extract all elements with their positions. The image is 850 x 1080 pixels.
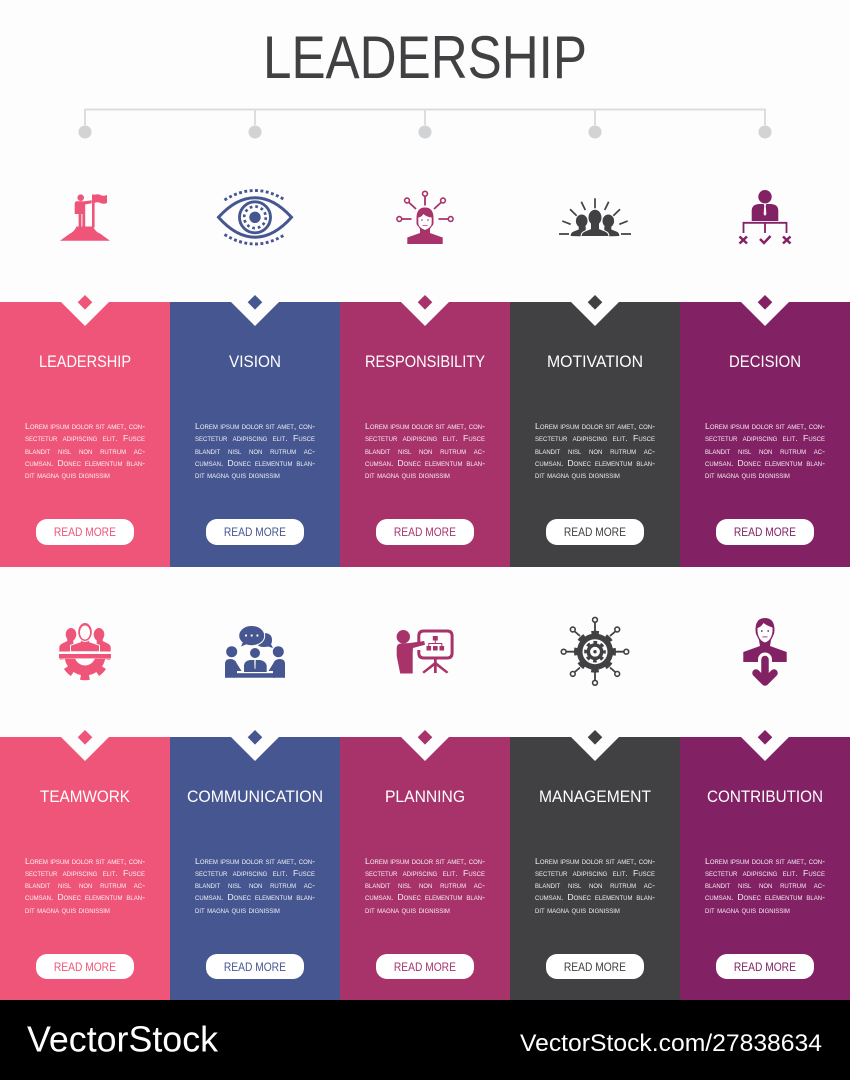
body text: blandit nisl non rutrum ac-	[25, 446, 145, 456]
body text: cumsan. Donec elementum blan-	[705, 458, 825, 468]
body text	[25, 421, 145, 480]
notch and diamond marker	[571, 295, 619, 326]
body text: blandit nisl non rutrum ac-	[535, 446, 655, 456]
body text: cumsan. Donec elementum blan-	[705, 892, 825, 902]
panel: Planning	[340, 737, 510, 1000]
body text: sectetur adipiscing elit. Fusce	[535, 868, 655, 878]
body text: dit magna quis dignissim	[705, 470, 790, 480]
panel: Communication	[170, 737, 340, 1000]
body text	[535, 856, 655, 915]
notch and diamond marker	[741, 730, 789, 761]
body text: blandit nisl non rutrum ac-	[535, 880, 655, 890]
body text: Lorem ipsum dolor sit amet, con-	[25, 421, 145, 431]
body text: sectetur adipiscing elit. Fusce	[25, 433, 145, 443]
heading: TEAMWORK	[40, 787, 131, 806]
body text: blandit nisl non rutrum ac-	[195, 446, 315, 456]
read more button: READ MORE	[224, 525, 286, 539]
panel: Motivation	[510, 302, 680, 567]
read more button: READ MORE	[394, 525, 456, 539]
notch and diamond marker	[231, 295, 279, 326]
heading: CONTRIBUTION	[707, 787, 823, 806]
body text	[535, 421, 655, 480]
body text: blandit nisl non rutrum ac-	[705, 880, 825, 890]
panel: Responsibility	[340, 302, 510, 567]
body text: dit magna quis dignissim	[25, 470, 110, 480]
body text	[365, 421, 485, 480]
notch and diamond marker	[741, 295, 789, 326]
read more button	[716, 954, 814, 979]
read more button	[546, 954, 644, 979]
body text: cumsan. Donec elementum blan-	[195, 892, 315, 902]
footer watermark bar: VectorStock	[27, 1018, 219, 1060]
timeline connector with five nodes	[78, 108, 772, 138]
heading: DECISION	[729, 352, 801, 371]
read more button	[206, 519, 304, 544]
notch and diamond marker	[571, 730, 619, 761]
body text: dit magna quis dignissim	[535, 905, 620, 915]
read more button: READ MORE	[394, 960, 456, 974]
body text	[195, 421, 315, 480]
heading: MOTIVATION	[547, 352, 643, 371]
body text: sectetur adipiscing elit. Fusce	[25, 868, 145, 878]
body text: dit magna quis dignissim	[365, 470, 450, 480]
body text: sectetur adipiscing elit. Fusce	[365, 433, 485, 443]
panel: Management	[510, 737, 680, 1000]
icon: eye	[216, 189, 294, 246]
body text: dit magna quis dignissim	[25, 905, 110, 915]
notch and diamond marker	[401, 295, 449, 326]
read more button: READ MORE	[54, 525, 116, 539]
body text: blandit nisl non rutrum ac-	[195, 880, 315, 890]
body text: sectetur adipiscing elit. Fusce	[705, 433, 825, 443]
read more button	[376, 519, 474, 544]
body text: Lorem ipsum dolor sit amet, con-	[705, 421, 825, 431]
body text: sectetur adipiscing elit. Fusce	[195, 868, 315, 878]
read more button: READ MORE	[224, 960, 286, 974]
read more button	[36, 519, 134, 544]
read more button	[546, 519, 644, 544]
read more button: READ MORE	[54, 960, 116, 974]
body text: sectetur adipiscing elit. Fusce	[365, 868, 485, 878]
body text	[705, 854, 825, 916]
read more button	[376, 954, 474, 979]
body text	[25, 856, 145, 915]
icon: group with rays	[559, 198, 631, 236]
icon: gear with radiating nodes	[560, 616, 630, 686]
footer watermark bar	[0, 1000, 850, 1080]
body text	[195, 856, 315, 915]
body text	[365, 856, 485, 915]
read more button: READ MORE	[564, 525, 626, 539]
body text: blandit nisl non rutrum ac-	[365, 880, 485, 890]
body text: dit magna quis dignissim	[365, 905, 450, 915]
panel: Contribution	[680, 737, 850, 1000]
icon: team meeting with speech bubbles	[225, 626, 285, 678]
heading: MANAGEMENT	[539, 787, 651, 806]
read more button: READ MORE	[734, 960, 796, 974]
body text: blandit nisl non rutrum ac-	[705, 446, 825, 456]
body text: sectetur adipiscing elit. Fusce	[535, 433, 655, 443]
body text: blandit nisl non rutrum ac-	[25, 880, 145, 890]
body text: dit magna quis dignissim	[535, 470, 620, 480]
body text: Lorem ipsum dolor sit amet, con-	[195, 421, 315, 431]
read more button: READ MORE	[734, 525, 796, 539]
body text: dit magna quis dignissim	[705, 905, 790, 915]
panel: Decision	[680, 302, 850, 567]
body text: Lorem ipsum dolor sit amet, con-	[365, 856, 485, 866]
icon: decision tree with manager	[738, 190, 792, 245]
body text: Lorem ipsum dolor sit amet, con-	[705, 856, 825, 866]
body text: Lorem ipsum dolor sit amet, con-	[535, 856, 655, 866]
read more button	[716, 519, 814, 544]
body text: cumsan. Donec elementum blan-	[535, 458, 655, 468]
heading: VISION	[229, 352, 281, 371]
body text: Lorem ipsum dolor sit amet, con-	[535, 421, 655, 431]
notch and diamond marker	[61, 295, 109, 326]
body text: cumsan. Donec elementum blan-	[25, 458, 145, 468]
body text: Lorem ipsum dolor sit amet, con-	[365, 421, 485, 431]
body text: cumsan. Donec elementum blan-	[365, 458, 485, 468]
body text: Lorem ipsum dolor sit amet, con-	[25, 856, 145, 866]
notch and diamond marker	[231, 730, 279, 761]
body text: sectetur adipiscing elit. Fusce	[705, 868, 825, 878]
read more button: READ MORE	[564, 960, 626, 974]
panel: Teamwork	[0, 737, 170, 1000]
body text: cumsan. Donec elementum blan-	[535, 892, 655, 902]
body text: dit magna quis dignissim	[195, 905, 280, 915]
icon: presenter at flip chart	[396, 630, 454, 674]
notch and diamond marker	[401, 730, 449, 761]
body text: Lorem ipsum dolor sit amet, con-	[195, 856, 315, 866]
read more button	[36, 954, 134, 979]
icon: person with downward arrow	[743, 618, 787, 686]
icon: person with radiating nodes	[396, 190, 454, 244]
body text: sectetur adipiscing elit. Fusce	[195, 433, 315, 443]
panel: Leadership	[0, 302, 170, 567]
heading: RESPONSIBILITY	[365, 352, 485, 371]
body text: blandit nisl non rutrum ac-	[365, 446, 485, 456]
read more button	[206, 954, 304, 979]
panel: Vision	[170, 302, 340, 567]
footer watermark bar: VectorStock.com/27838634	[520, 1030, 822, 1057]
body text: cumsan. Donec elementum blan-	[25, 892, 145, 902]
body text: cumsan. Donec elementum blan-	[195, 458, 315, 468]
icon: team above half gear	[59, 623, 111, 680]
body text: cumsan. Donec elementum blan-	[365, 892, 485, 902]
body text	[705, 421, 825, 480]
heading: LEADERSHIP	[39, 352, 131, 371]
heading: COMMUNICATION	[187, 787, 323, 806]
notch and diamond marker	[61, 730, 109, 761]
icon: leader with flag on summit	[60, 194, 110, 241]
body text: dit magna quis dignissim	[195, 470, 280, 480]
heading: PLANNING	[385, 787, 465, 806]
